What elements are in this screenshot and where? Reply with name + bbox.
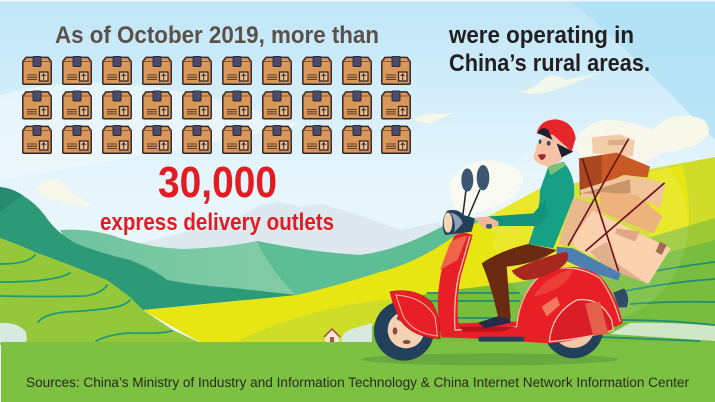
rider hand — [475, 217, 498, 228]
rear exhaust — [613, 288, 628, 307]
footboard bar — [478, 337, 524, 342]
scooter body — [438, 233, 623, 343]
big number: 30,000 — [158, 158, 277, 207]
right terraces — [368, 223, 715, 345]
parcels — [558, 134, 671, 284]
terrace lines — [0, 255, 172, 341]
lime background hill right — [300, 157, 715, 345]
heading right — [448, 22, 650, 77]
hills, terraces — [0, 127, 715, 345]
ground band — [1, 342, 715, 402]
terraced left hill — [0, 238, 205, 345]
distant grey mountains — [60, 202, 440, 262]
clouds — [36, 73, 709, 206]
fold shading — [257, 222, 470, 295]
rider trousers — [482, 244, 557, 318]
rider head — [533, 135, 564, 167]
rider shoes — [478, 317, 511, 328]
cargo straps — [568, 139, 664, 271]
hair — [557, 143, 573, 157]
front fender — [390, 291, 440, 339]
mid green hill — [60, 215, 500, 300]
handlebar grip — [486, 224, 492, 229]
headlight — [443, 210, 475, 235]
mirrors — [461, 165, 489, 217]
heading left: As of October 2019, more than — [55, 22, 379, 49]
large translucent glow — [492, 127, 688, 323]
top-right darker sky — [570, 0, 715, 140]
small house icon — [324, 329, 340, 343]
rider arm — [487, 200, 548, 226]
rider — [475, 119, 576, 328]
dark green hill — [0, 187, 297, 310]
scooter front wheel — [374, 301, 434, 361]
number caption: express delivery outlets — [100, 209, 334, 236]
yellow field — [143, 190, 575, 345]
scooter and rider — [362, 119, 671, 365]
heading right: were operating in — [448, 22, 634, 49]
rider seat — [512, 252, 568, 280]
heading right: China’s rural areas. — [449, 50, 650, 77]
pale mist bands — [610, 323, 715, 341]
rider torso — [528, 162, 574, 248]
pale cloud behind mirrors — [450, 160, 523, 215]
rear cowl panel — [549, 300, 613, 342]
ground shadow — [362, 353, 618, 365]
pale sky swoosh — [0, 83, 300, 180]
luggage rack — [557, 247, 621, 281]
source line: Sources: China’s Ministry of Industry and Information Technology & China Internet Network Information Center — [26, 375, 690, 390]
yellow glow patch — [650, 165, 689, 245]
parcel icon grid: 30 boxes — [23, 56, 410, 153]
scooter rear wheel — [543, 298, 603, 358]
yellow-green slope — [235, 285, 600, 345]
rider helmet — [537, 119, 576, 152]
